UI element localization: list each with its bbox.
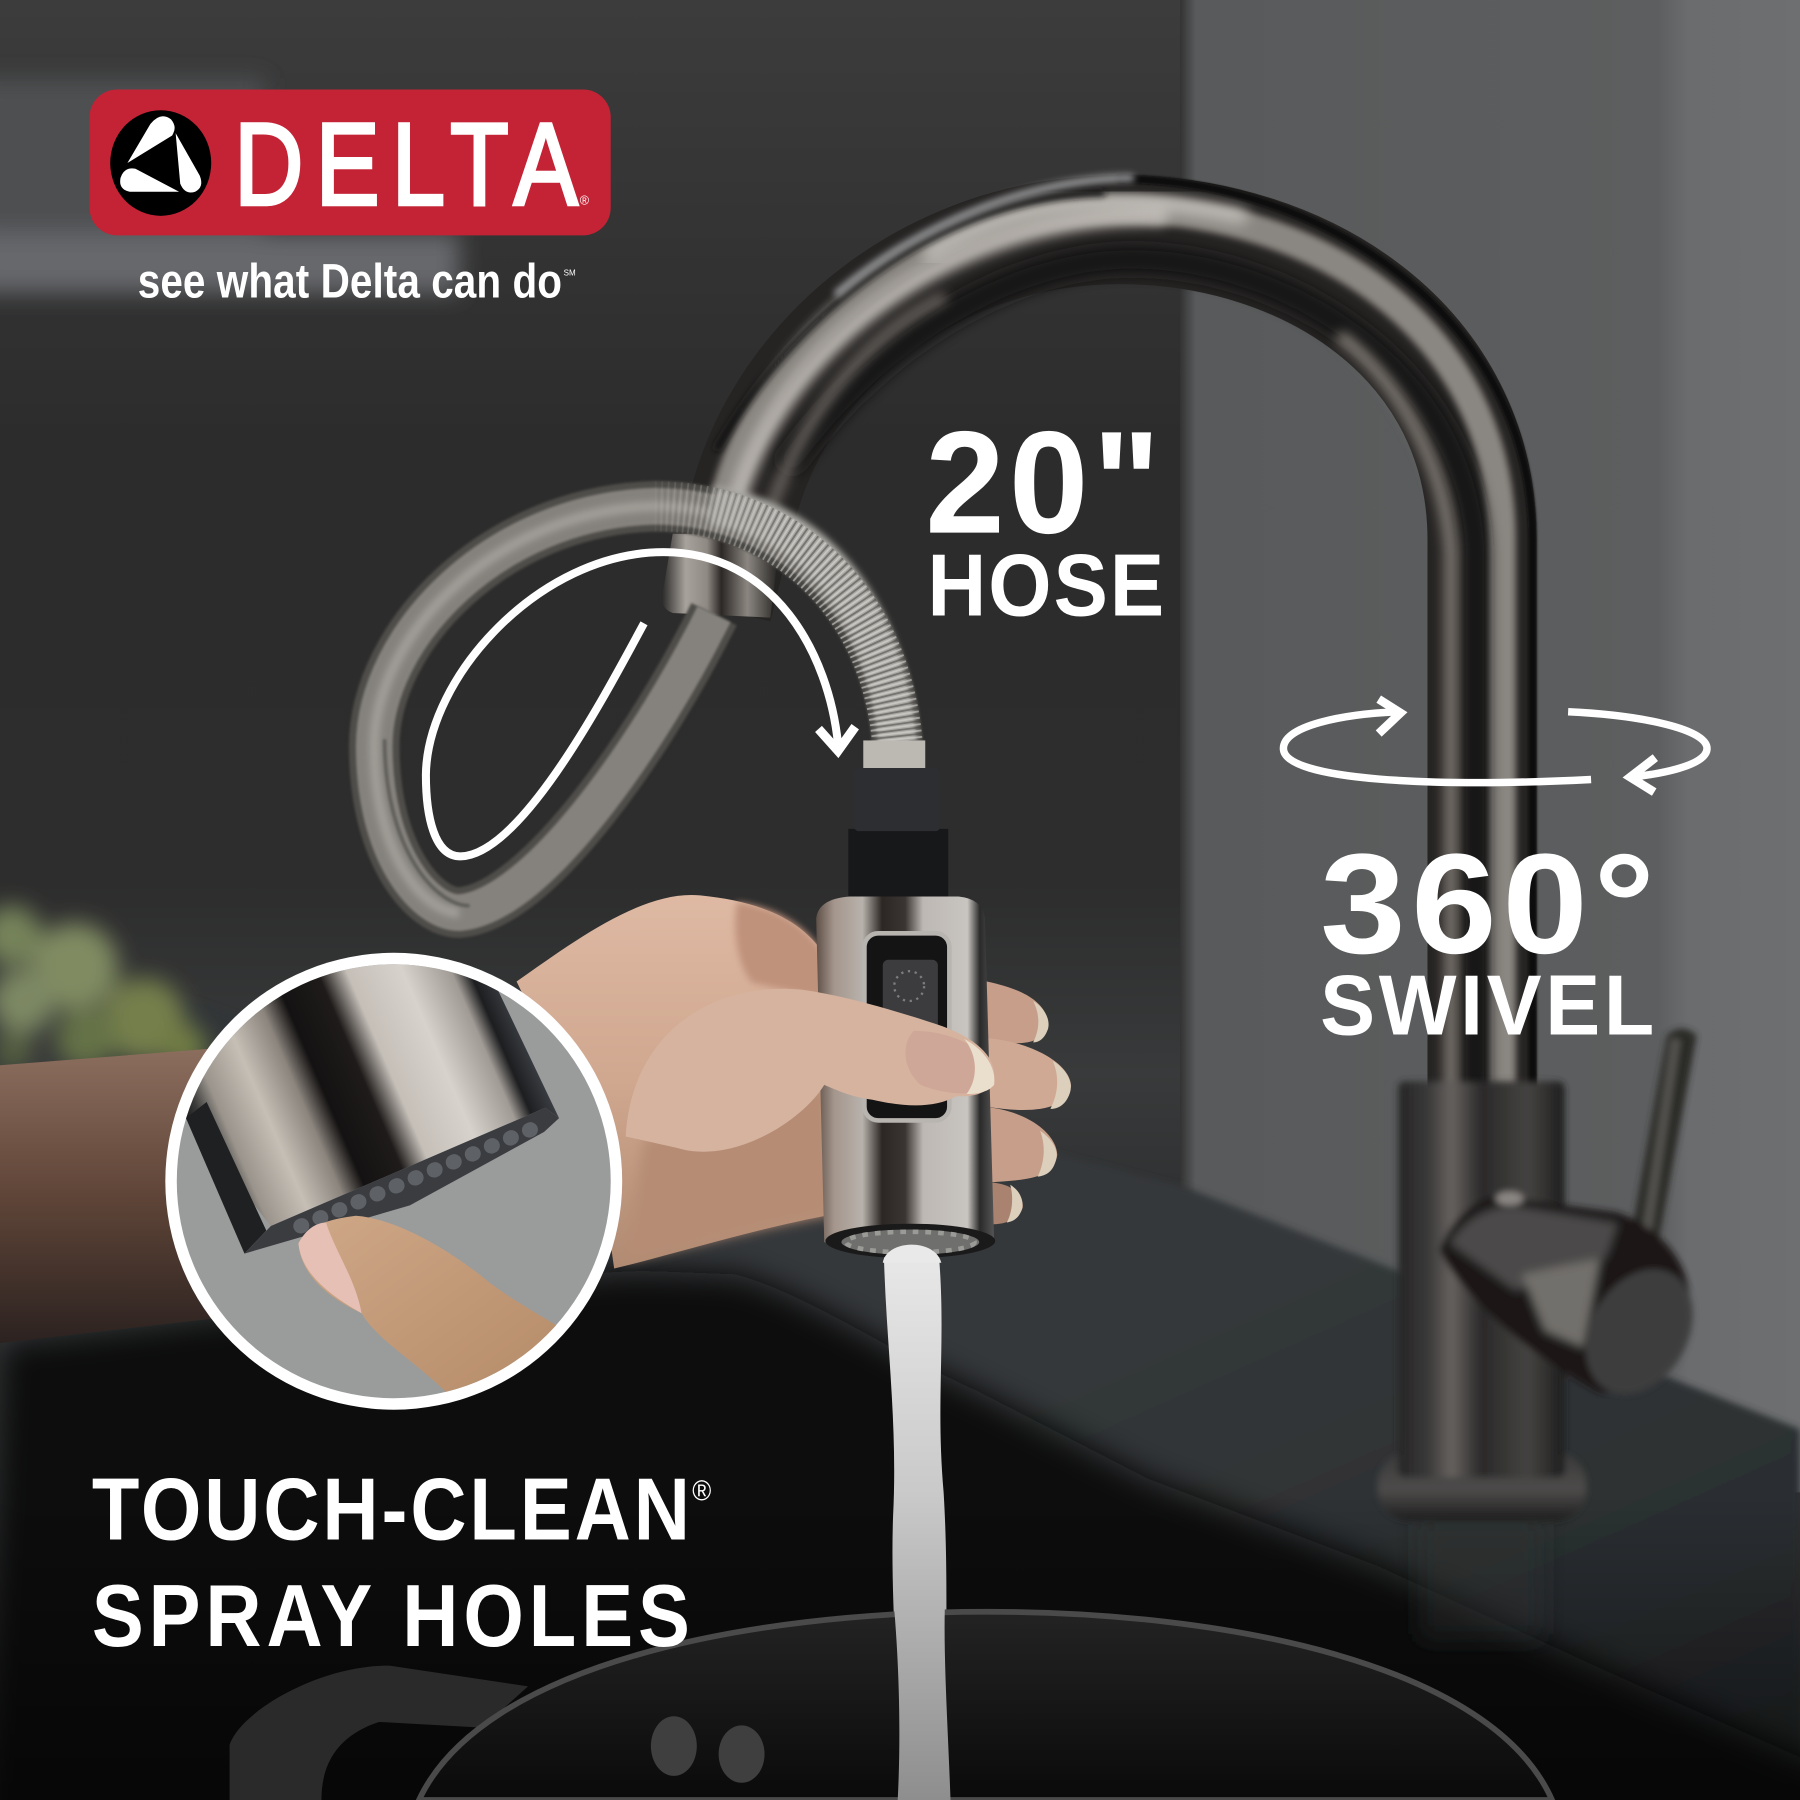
callout: 360 degree swivel [1320, 825, 1655, 1053]
spray head [816, 740, 995, 1263]
reflection on counter [1418, 1515, 1544, 1642]
tagline: see what Delta can do [138, 255, 562, 308]
fingernails [1007, 1001, 1071, 1223]
finger 4 [987, 1182, 1023, 1224]
wand body [816, 897, 994, 1255]
close-up spray nozzle [186, 964, 559, 1254]
wordmark: DELTA [234, 98, 578, 229]
faucet spout arc [717, 178, 1533, 1102]
lens: touch-clean close-up [161, 930, 631, 1412]
registered mark: ® [692, 1474, 711, 1507]
handle lever [1627, 1029, 1697, 1260]
shelf in background [0, 78, 459, 293]
callout: touch-clean spray holes: TOUCH-CLEAN [92, 1460, 690, 1559]
finger 3 [982, 1107, 1057, 1182]
hose [374, 506, 898, 913]
outer rim left [717, 193, 1102, 448]
logo badge [90, 90, 611, 235]
service mark: SM [564, 269, 576, 278]
delta icon [110, 110, 211, 216]
registered mark: ® [580, 193, 590, 207]
nozzle rim [825, 1224, 995, 1258]
water over pot [894, 1609, 951, 1800]
grapes [0, 906, 207, 1070]
inner light band [1343, 339, 1451, 1102]
callout: 360 degree swivel: 360° [1320, 825, 1655, 984]
finger 2 [982, 1038, 1071, 1110]
hand: thumb [626, 989, 994, 1152]
close-up fingertip [298, 1216, 556, 1392]
arrow: hose extension [426, 552, 855, 856]
spout collar [662, 534, 781, 618]
black outer rim right [1119, 179, 1533, 1102]
water stream [884, 1248, 951, 1800]
pot lid [419, 1612, 1552, 1800]
callout: 20 inch hose: 20" [925, 400, 1160, 564]
callout: 20 inch hose [925, 400, 1164, 634]
swivel label: SWIVEL [1320, 957, 1654, 1053]
finger 1 [982, 980, 1048, 1043]
hose label: HOSE [928, 535, 1164, 634]
pot in sink [230, 1609, 1552, 1800]
countertop [0, 993, 1800, 1800]
arm [0, 1048, 298, 1343]
spray holes label: SPRAY HOLES [92, 1567, 690, 1665]
water start [883, 1245, 941, 1263]
hand: back of palm and fingers [517, 895, 1071, 1268]
handle body [1440, 1196, 1690, 1393]
spray button [864, 933, 949, 1120]
outer highlight band [722, 209, 1502, 1102]
thumbnail [905, 1031, 994, 1093]
faucet base [1378, 1029, 1714, 1642]
pot handle [230, 1666, 528, 1800]
sink basin [0, 1271, 1800, 1800]
hose ferrule [863, 740, 925, 769]
black connector [848, 829, 948, 907]
pot lid rivets [651, 1716, 765, 1783]
braid texture [654, 506, 898, 746]
arrows: swivel rotation [1283, 699, 1707, 792]
callout: touch-clean spray holes [92, 1460, 711, 1665]
inner dark band [792, 259, 1475, 1102]
